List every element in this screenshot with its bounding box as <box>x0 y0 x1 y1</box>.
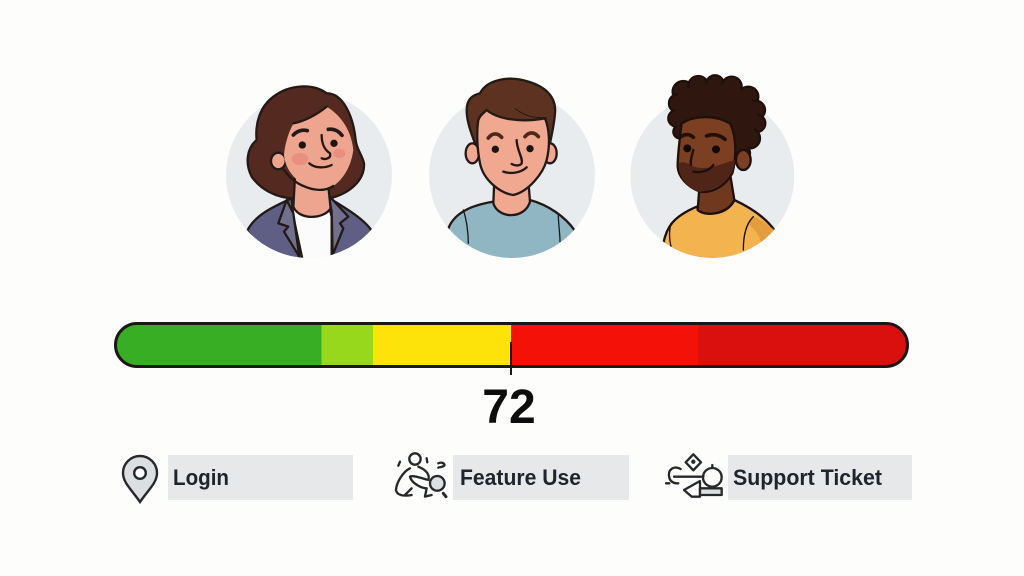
avatar: man with curly hair and yellow shirt <box>630 75 794 267</box>
avatar: woman with brown hair and blazer <box>226 86 392 263</box>
label: feature use: Feature Use <box>460 465 581 490</box>
label: login: Login <box>173 465 229 490</box>
label: support ticket: Support Ticket <box>733 465 883 490</box>
label: feature use <box>453 455 629 500</box>
score value: 72 <box>482 381 536 434</box>
legend item: login <box>123 455 353 502</box>
label: login <box>168 455 353 500</box>
legend item: support ticket <box>666 454 912 500</box>
icon: location pin <box>123 456 157 502</box>
icon: support ticket shapes <box>666 454 722 497</box>
avatar: man with short brown hair and blue shirt <box>429 79 595 263</box>
icon: feature use figures <box>396 453 446 497</box>
legend item: feature use <box>396 453 629 500</box>
score marker <box>510 342 512 375</box>
label: support ticket <box>728 455 912 500</box>
score bar <box>115 324 908 366</box>
